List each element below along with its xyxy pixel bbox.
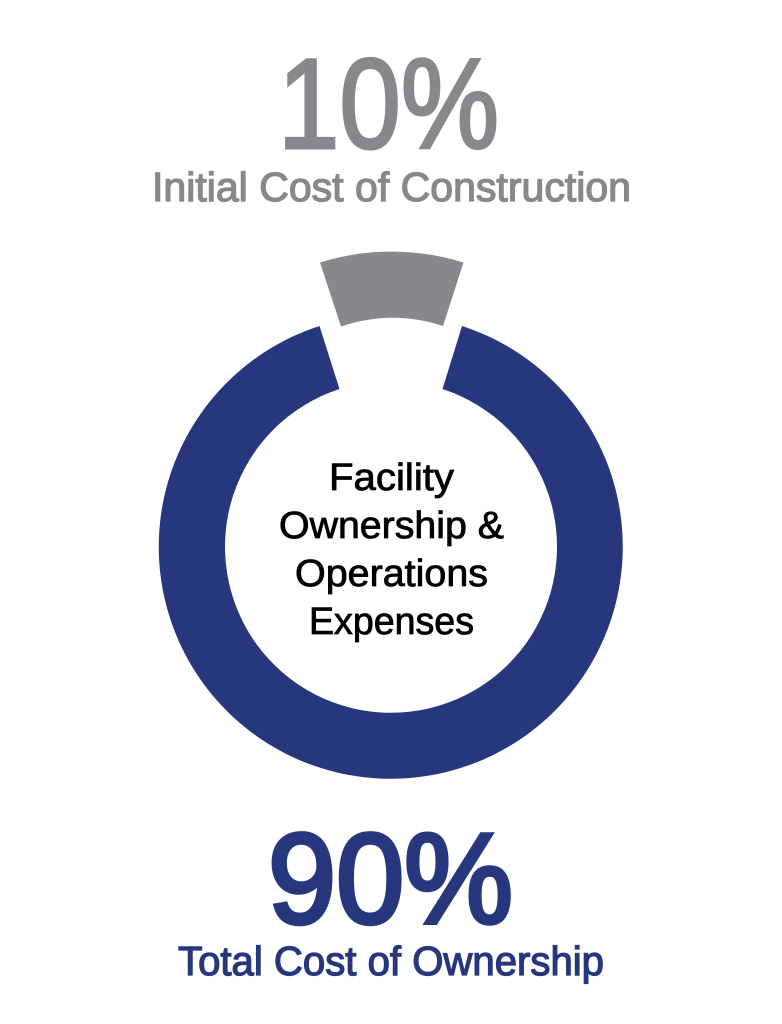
heading: 90 percent: 90% — [268, 808, 513, 951]
center label: Expenses — [309, 601, 474, 643]
subheading: initial cost of construction: Initial Cost of Construction — [152, 164, 631, 210]
heading: 10 percent: 10% — [278, 33, 499, 176]
center label — [279, 457, 504, 643]
center label: Operations — [295, 553, 488, 595]
subheading: total cost of ownership: Total Cost of Ownership — [178, 938, 604, 984]
chart: donut segment blue 90 percent — [159, 326, 623, 779]
center label: Ownership & — [279, 505, 504, 547]
center label: Facility — [329, 457, 454, 499]
chart: donut segment gray 10 percent — [320, 252, 464, 326]
